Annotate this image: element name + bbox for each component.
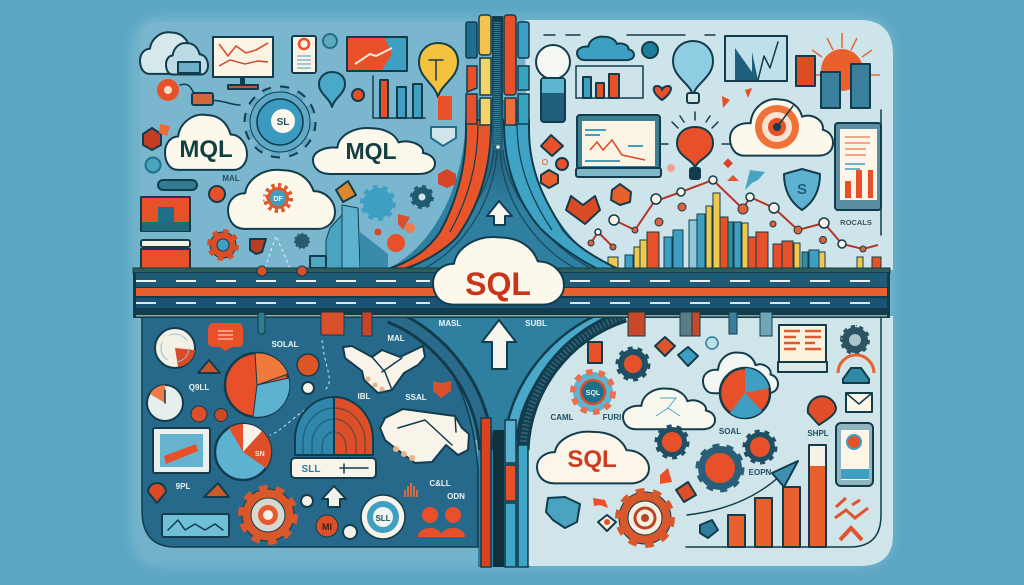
icon: SLL coin bbox=[361, 495, 405, 539]
icon: red dial bbox=[209, 186, 225, 202]
label: MAL: MAL bbox=[387, 334, 405, 343]
icon: phone bbox=[836, 423, 873, 486]
lane blocks bbox=[466, 15, 529, 125]
icon: path markers bbox=[265, 236, 290, 268]
icon: small compass bbox=[301, 495, 313, 507]
label: 9PL: 9PL bbox=[176, 482, 190, 491]
icon: red trend card bbox=[347, 37, 407, 71]
right rule bbox=[880, 110, 882, 235]
icon: tablet report bbox=[835, 123, 881, 210]
lane divider right bbox=[517, 124, 552, 230]
icon: dark gear small bbox=[295, 234, 309, 248]
lower vertical highway bbox=[390, 316, 625, 567]
label bar: SLL bbox=[291, 458, 376, 478]
top rule dashes bbox=[544, 34, 715, 36]
center cloud SQL: SQL bbox=[465, 266, 531, 302]
upper vertical highway bbox=[388, 15, 618, 269]
label: MASL: MASL bbox=[439, 319, 461, 328]
icon: orange charms bbox=[374, 214, 415, 252]
spine light bbox=[496, 145, 500, 149]
icon: red container bbox=[796, 56, 815, 86]
icon: dark gear top right bbox=[842, 327, 868, 353]
center arrow lower bbox=[482, 320, 516, 369]
connector clips bbox=[258, 312, 772, 336]
icon: large blue gear bbox=[247, 89, 313, 155]
icon: bulb jar bbox=[536, 45, 570, 122]
icon: document bbox=[292, 36, 316, 73]
curved orange lane bbox=[388, 120, 491, 269]
icon: red tag bbox=[588, 342, 602, 363]
lower spine bbox=[493, 430, 504, 567]
icon: dark gear with red core bbox=[618, 349, 648, 379]
icon: blue gear bbox=[363, 188, 393, 218]
chart: blue strip bbox=[162, 514, 229, 537]
curved blue lane bbox=[504, 120, 618, 269]
label: SUBL: SUBL bbox=[525, 319, 547, 328]
soft backdrop glow bbox=[130, 16, 894, 568]
icons: two people bbox=[418, 507, 465, 537]
label: SHPL: SHPL bbox=[807, 429, 829, 438]
icon: cube bbox=[611, 184, 631, 205]
icon: lower handshake bbox=[380, 409, 469, 463]
icon: speech bubble bbox=[208, 323, 243, 351]
center arrow up bbox=[487, 201, 512, 225]
icon: badge gear bbox=[573, 372, 613, 412]
bar chart bbox=[373, 76, 425, 118]
label bar: SLL: SLL bbox=[302, 464, 320, 475]
label: SSAL: SSAL bbox=[405, 393, 427, 402]
icon: orange star bbox=[159, 124, 170, 136]
panel: top left MQL bbox=[140, 22, 466, 270]
icon: red gem bbox=[655, 337, 675, 356]
pie chart two: SN bbox=[255, 451, 265, 458]
icon: magnifier bbox=[706, 337, 718, 349]
chart: dark peaks bbox=[725, 36, 787, 81]
combo chart: bars and trend bbox=[588, 176, 881, 269]
icons: small red dots bbox=[191, 406, 228, 422]
label: MAL: MAL bbox=[222, 174, 240, 183]
icon: sun bbox=[806, 33, 880, 91]
icon: storefront card bbox=[141, 197, 190, 231]
icon: blue bulb bbox=[673, 41, 713, 103]
icons: red hexagons bbox=[541, 135, 568, 188]
label: C&LL: C&LL bbox=[429, 479, 451, 488]
cloud: SQL bbox=[537, 432, 649, 483]
icon: shield bbox=[784, 169, 820, 210]
icon: buildings bbox=[310, 205, 388, 268]
icon: large red gear bbox=[242, 489, 294, 541]
icons: markers bbox=[667, 88, 765, 190]
icon: MI token: MI bbox=[322, 522, 332, 532]
icon: shield: S bbox=[797, 181, 807, 198]
icon: small orb bbox=[642, 42, 658, 58]
icon: red book bbox=[566, 196, 600, 224]
icon: monitor chart bbox=[213, 37, 273, 89]
cloud: MQL right: MQL bbox=[345, 138, 397, 164]
icon: big orange gear bbox=[619, 492, 671, 544]
chart: framed trend bbox=[153, 428, 210, 473]
cloud: MQL right bbox=[313, 128, 435, 174]
icon: cloud storage bbox=[140, 32, 208, 74]
panel frame line bbox=[686, 318, 881, 547]
cloud: SQL: SQL bbox=[567, 446, 617, 473]
icon: gear two bbox=[745, 432, 775, 462]
icon: upper handshake bbox=[343, 346, 425, 393]
center cloud SQL bbox=[433, 237, 564, 305]
icon: SLL coin: SLL bbox=[375, 514, 391, 523]
icon: arch bbox=[838, 355, 874, 383]
icon: red gem bbox=[433, 381, 451, 398]
label: CAML: CAML bbox=[550, 413, 574, 422]
icon: pin with text bbox=[808, 396, 836, 425]
icon: envelope bbox=[846, 393, 872, 412]
icon: large center gear bbox=[698, 446, 742, 490]
icon: heart bbox=[654, 86, 671, 100]
icon: red token bbox=[297, 354, 319, 376]
icon: key token bbox=[343, 525, 357, 539]
icon: gauge two bbox=[147, 385, 183, 421]
curved lanes bbox=[390, 316, 625, 450]
icon: database blue bbox=[821, 64, 870, 108]
icon: badge gear: SQL bbox=[586, 390, 601, 397]
icon: blue gem bbox=[678, 347, 698, 366]
label: IBL: IBL bbox=[358, 392, 371, 401]
label: SOLAL: SOLAL bbox=[271, 340, 299, 349]
icon: white arrow bbox=[322, 486, 346, 507]
central junction fill bbox=[370, 100, 640, 567]
road markers bbox=[257, 266, 307, 276]
icon: white token bbox=[302, 382, 314, 394]
label: Q9LL: Q9LL bbox=[189, 383, 209, 392]
icon: MI token bbox=[316, 515, 338, 537]
icon: small blue cloud bbox=[577, 37, 634, 60]
chart: mini bars bbox=[576, 66, 643, 98]
icon: large blue gear: SL bbox=[277, 117, 289, 128]
fan streaks bbox=[405, 150, 590, 268]
icon: blue bulb bbox=[319, 72, 345, 107]
horizontal highway bbox=[133, 266, 890, 336]
icon: pill bbox=[158, 180, 197, 190]
center spine fan bbox=[460, 16, 535, 205]
panel: bottom right bbox=[527, 316, 893, 566]
panel: top right bbox=[525, 20, 893, 270]
icon: mountain card bbox=[336, 181, 356, 202]
growth bars with arrow bbox=[687, 445, 826, 547]
icon: red gear bbox=[210, 232, 236, 258]
icon: triangle bbox=[204, 483, 229, 497]
label: EOPN: EOPN bbox=[749, 468, 772, 477]
lane divider left bbox=[450, 124, 478, 232]
lane blocks bbox=[481, 418, 528, 567]
icon: laptop table bbox=[778, 325, 827, 372]
icon: red pin bbox=[148, 483, 166, 503]
icon: dashed path bbox=[270, 340, 329, 435]
pie chart one bbox=[225, 353, 290, 417]
pie chart three bbox=[720, 368, 770, 418]
icon: crest bbox=[431, 127, 456, 146]
cloud: gear bbox=[228, 170, 335, 229]
cloud: pie backing bbox=[703, 352, 778, 393]
icon: red badge with wire bbox=[157, 79, 240, 105]
cloud: MQL left: MQL bbox=[179, 136, 233, 163]
icons: small red pieces bbox=[593, 468, 868, 540]
icon: small red bars bbox=[405, 483, 417, 497]
icon: gear one bbox=[657, 427, 687, 457]
icon: laptop chart bbox=[576, 115, 661, 177]
icon: teal coin bbox=[146, 158, 160, 172]
label: FURI: FURI bbox=[603, 413, 621, 422]
icon: red bulb bbox=[660, 112, 730, 180]
label: ODN: ODN bbox=[447, 492, 465, 501]
icon: envelope card bbox=[141, 240, 190, 269]
cloud: gear: DF bbox=[273, 196, 283, 203]
icon: half-circle gauge bbox=[295, 397, 373, 455]
icon: dark gear bbox=[412, 187, 432, 207]
icon: red hexagon right bbox=[438, 169, 456, 188]
cloud: target bbox=[730, 99, 833, 156]
icon: red hexagon bbox=[143, 128, 161, 150]
icon: yellow bulb bbox=[419, 43, 458, 120]
label: ROCALS: ROCALS bbox=[840, 218, 872, 227]
label: SOAL: SOAL bbox=[719, 427, 741, 436]
icon: teal badge bbox=[323, 34, 337, 48]
icon: red shield bbox=[250, 239, 266, 254]
cloud: flow bbox=[623, 388, 715, 429]
icon: pin bbox=[352, 89, 364, 101]
icon: small triangle bbox=[198, 360, 220, 373]
pie chart two bbox=[215, 424, 271, 480]
cloud: MQL left bbox=[165, 115, 247, 170]
icon: blue blob bbox=[546, 497, 580, 528]
icon: big gauge bbox=[155, 328, 195, 368]
panel: bottom left bbox=[142, 316, 478, 547]
